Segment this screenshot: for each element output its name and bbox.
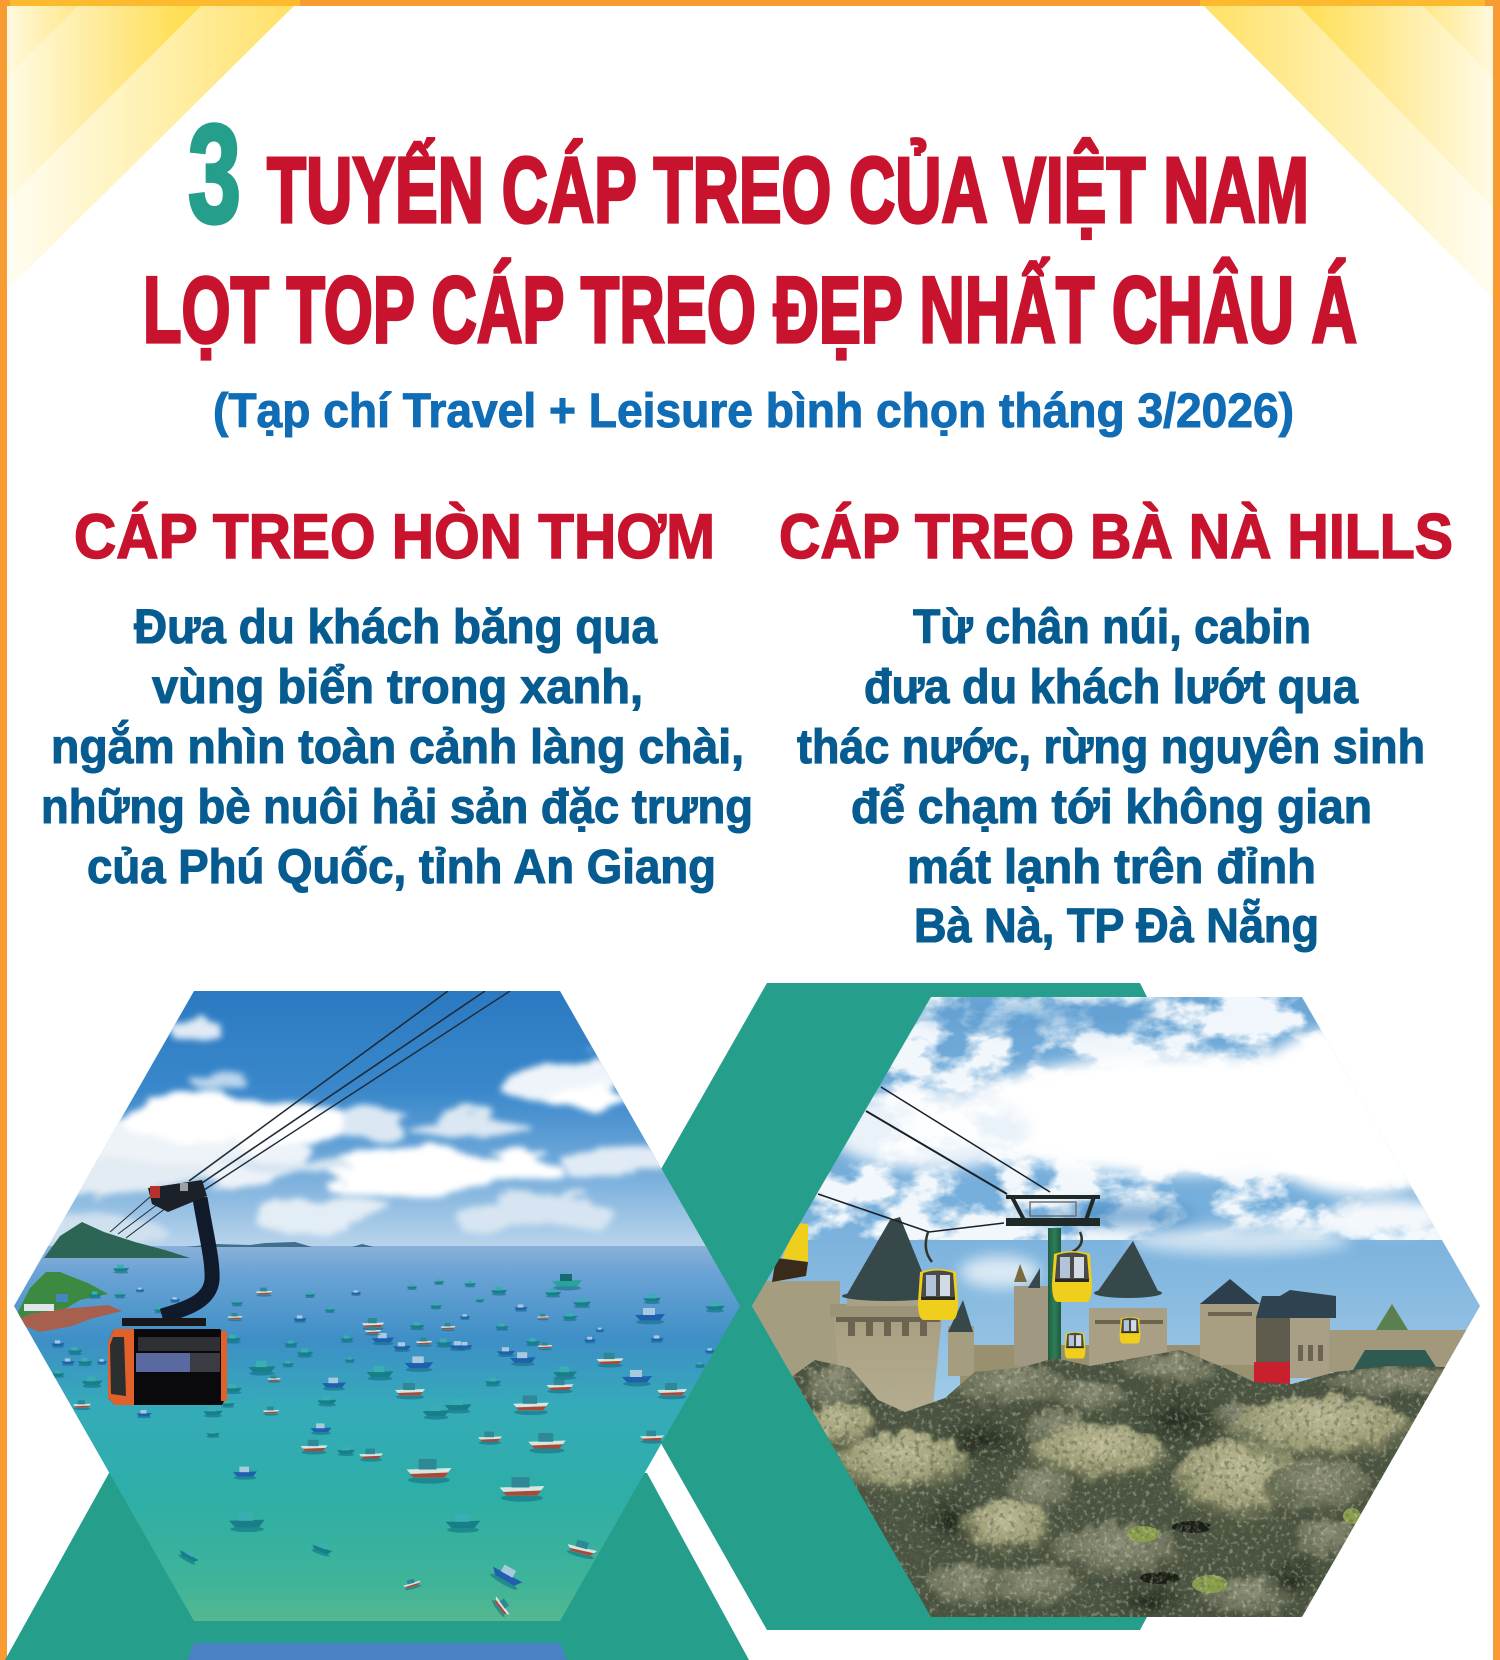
subtitle: (Tạp chí Travel + Leisure bình chọn tháng 3/2026) (213, 385, 1294, 438)
fishing boats (51, 1265, 725, 1619)
right column description (797, 601, 1425, 953)
clouds (790, 997, 1442, 1296)
right column heading: CÁP TREO BÀ NÀ HILLS (779, 502, 1453, 572)
forest (792, 1350, 1445, 1617)
left column description (41, 601, 753, 894)
blue footer tab (187, 1643, 567, 1660)
sky (740, 990, 1490, 1410)
sky (46, 991, 708, 1250)
coastal village (14, 1272, 122, 1332)
dark canopy gaps (1140, 1521, 1212, 1584)
cable car carriage arm (162, 1198, 212, 1316)
distant islands (186, 1242, 374, 1247)
forest base (792, 1350, 1445, 1617)
cabin (108, 1318, 227, 1405)
foliage speckle (807, 1351, 1438, 1617)
title numeral 3: 3 (188, 95, 241, 252)
top-left yellow light rays (0, 0, 300, 290)
overhead cables (818, 1087, 1050, 1232)
photo: Hon Thom cable car over sea (0, 985, 760, 1626)
pylon mast (1048, 1228, 1061, 1368)
left column heading: CÁP TREO HÒN THƠM (74, 502, 715, 572)
photo: Ba Na Hills castle and cable cars (740, 990, 1490, 1630)
carriage head (148, 1180, 207, 1212)
left column description: những bè nuôi hải sản đặc trưng (41, 781, 753, 834)
yellow cabins (772, 1223, 1140, 1359)
right column description: Bà Nà, TP Đà Nẵng (914, 898, 1319, 953)
overhead cables (110, 991, 510, 1238)
castle battlement shadows (836, 1312, 1323, 1361)
castle walls (752, 1281, 1479, 1415)
pylon head frame (1006, 1197, 1100, 1222)
teal hexagon behind right photo (583, 983, 1147, 1630)
left column description: vùng biển trong xanh, (152, 661, 643, 714)
top-right yellow light rays (1198, 0, 1500, 298)
right column description: để chạm tới không gian (851, 781, 1372, 834)
bright green tree crowns (1127, 1508, 1361, 1593)
right column description: Từ chân núi, cabin (913, 601, 1311, 654)
right column description: thác nước, rừng nguyên sinh (797, 721, 1425, 774)
teal hexagon behind left photo (5, 1473, 749, 1660)
right column description: mát lạnh trên đỉnh (907, 841, 1316, 894)
clouds (15, 1016, 660, 1250)
left column description: Đưa du khách băng qua (134, 601, 657, 654)
sea (0, 1246, 760, 1626)
left column description: ngắm nhìn toàn cảnh làng chài, (51, 719, 744, 774)
title (143, 95, 1357, 362)
island hill (44, 1222, 190, 1258)
left column description: của Phú Quốc, tỉnh An Giang (87, 841, 716, 894)
tree clumps (801, 1352, 1480, 1624)
castle roofs (842, 1217, 1438, 1370)
right column description: đưa du khách lướt qua (864, 661, 1358, 714)
